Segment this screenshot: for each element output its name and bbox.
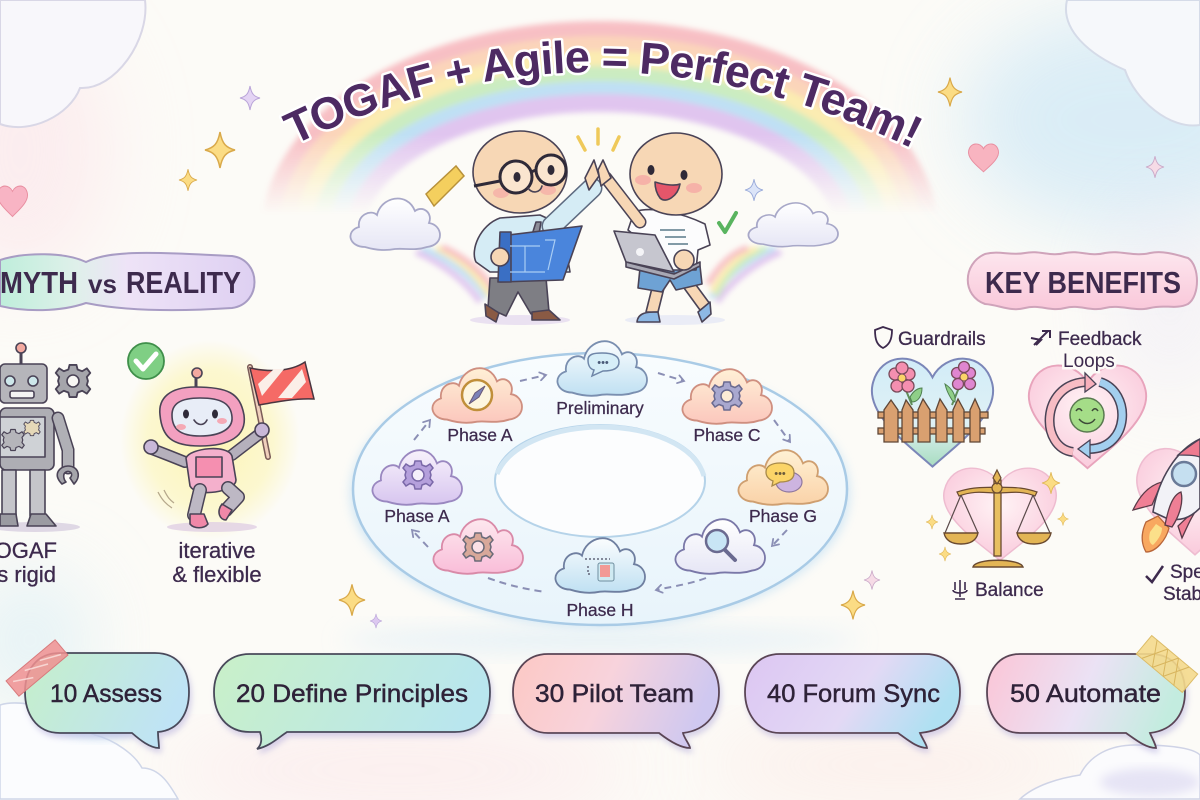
stage: preliminary [556, 341, 647, 418]
stage: phase G: ••• [774, 468, 786, 480]
reality caption [172, 538, 262, 587]
reality robot [120, 340, 314, 540]
washi tape: pink [6, 640, 68, 696]
washi tape: yellow [1136, 636, 1198, 692]
step 2 bubble [214, 654, 490, 749]
step 5 bubble [987, 654, 1185, 748]
heading: key benefits [968, 252, 1197, 309]
benefit: feedback loops [1029, 329, 1146, 468]
stage: phase H [555, 538, 645, 620]
stage: phase A top: Phase A [447, 425, 513, 445]
stage: phase C [682, 369, 772, 445]
step 1 bubble [25, 653, 189, 748]
heading: myth vs reality: REALITY [126, 265, 241, 300]
stage: preliminary: ••• [597, 357, 609, 369]
stage: phase A left: Phase A [384, 506, 450, 526]
step 4 bubble [745, 654, 960, 748]
heading: myth vs reality [0, 253, 254, 310]
benefit: feedback loops: Feedback [1058, 329, 1142, 350]
stage: preliminary: Preliminary [556, 398, 644, 418]
ring platform [350, 353, 850, 627]
step bubbles [25, 653, 1185, 749]
hero clouds [350, 199, 838, 250]
hero: architect character [470, 131, 599, 325]
title: TOGAF + Agile = Perfect Team! [281, 38, 922, 150]
heading: myth vs reality: vs [88, 269, 117, 299]
step 5 bubble: 50 Automate [1010, 680, 1161, 708]
cycle arrows [412, 373, 790, 592]
mini rainbows [416, 247, 781, 302]
myth caption [0, 538, 57, 587]
stage: phase C: Phase C [693, 425, 761, 445]
reality caption: iterative [178, 538, 256, 563]
benefit: feedback loops: Loops [1063, 351, 1115, 372]
step 2 bubble: 20 Define Principles [236, 680, 468, 708]
stage: phase A top [432, 368, 522, 445]
stage: phase G: Phase G [749, 506, 817, 526]
stage: phase G [738, 450, 828, 526]
benefit: guardrails: Guardrails [898, 329, 986, 350]
step 1 bubble: 10 Assess [50, 680, 162, 708]
heading: myth vs reality: MYTH [0, 265, 78, 300]
benefit: guardrails [872, 327, 993, 467]
reality caption: & flexible [172, 562, 262, 587]
hero: agile character [598, 133, 725, 325]
benefit: balance: Balance [975, 580, 1044, 601]
benefit: balance [926, 468, 1068, 601]
sparkles and hearts [0, 78, 1164, 628]
benefit: speed and stability [1133, 439, 1200, 605]
myth robot [0, 343, 90, 532]
icons: high-five spark, ruler, check [426, 129, 736, 232]
stage: phase A left [372, 450, 462, 526]
ADM ring diagram [350, 341, 850, 627]
step 3 bubble: 30 Pilot Team [535, 680, 694, 708]
step 4 bubble: 40 Forum Sync [767, 680, 940, 708]
rainbow arc [268, 18, 932, 206]
shield icon [875, 327, 892, 348]
stage: magnifier [675, 519, 765, 574]
stage: phase H: Phase H [566, 600, 634, 620]
stage: pink gear [433, 519, 523, 574]
step 3 bubble [513, 654, 719, 748]
